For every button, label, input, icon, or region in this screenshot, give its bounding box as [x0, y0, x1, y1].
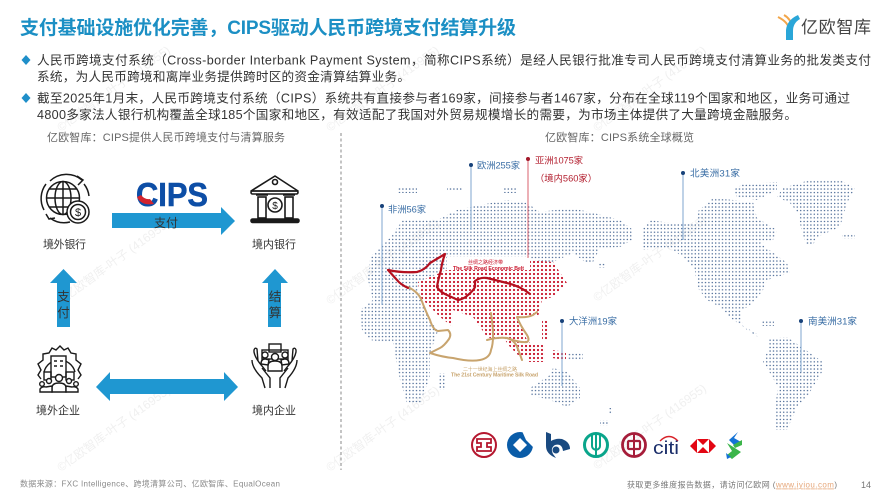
icon: Bank of China	[622, 433, 646, 457]
icon: ICBC	[472, 433, 496, 457]
callout: Oceania: 大洋洲19家	[569, 316, 618, 326]
callout: South America: 南美洲31家	[808, 316, 857, 328]
logo: 亿欧智库: 亿欧智库	[801, 18, 871, 37]
right panel heading: 亿欧智库：CIPS系统全球概览	[545, 130, 694, 144]
callout: Europe: 欧洲255家	[477, 160, 520, 170]
arrow: domestic enterprise to domestic bank: 结	[269, 290, 281, 304]
arrow: payment to domestic bank	[112, 207, 235, 235]
callout: Asia: （境内560家）	[535, 172, 597, 184]
label: Maritime Silk Road	[451, 366, 538, 378]
label box: Silk Road Economic Belt	[447, 257, 530, 272]
icon: HSBC	[690, 439, 716, 453]
icon: Standard Chartered	[726, 432, 742, 459]
label: overseas bank: 境外银行	[43, 237, 86, 251]
label: Maritime Silk Road: The 21st Century Maritime Silk Road	[451, 372, 538, 378]
map: Belt and Road dots	[418, 260, 567, 362]
title: 支付基础设施优化完善，CIPS驱动人民币跨境支付结算升级	[20, 16, 516, 39]
footer: data source: 数据来源：FXC Intelligence、跨境清算公司、亿欧智库、EqualOcean	[20, 478, 280, 488]
watermarks: ©亿欧智库-叶子 (416955)	[54, 42, 173, 134]
callout: Asia	[526, 154, 597, 258]
bullet text block 1	[22, 52, 871, 84]
watermarks	[54, 42, 709, 474]
callout: Oceania	[560, 316, 618, 386]
callout: South America	[799, 316, 857, 372]
watermarks: ©亿欧智库-叶子 (416955)	[323, 42, 442, 134]
watermarks: ©亿欧智库-叶子 (416955)	[54, 215, 173, 307]
panel: CIPS payment flow	[36, 174, 299, 417]
arrow: domestic enterprise to domestic bank: 算	[269, 305, 281, 320]
icon: Bank of Communications	[546, 432, 570, 458]
CIPS logo: CIPS	[136, 176, 208, 213]
map: Eurasia and Africa dots	[360, 187, 633, 403]
logo: 亿欧智库	[778, 15, 871, 40]
chart: CIPS world dot map	[360, 154, 857, 430]
bank logos row	[472, 431, 742, 459]
watermarks: ©亿欧智库-叶子 (416955)	[590, 212, 709, 304]
watermarks: ©亿欧智库-叶子 (416955)	[54, 382, 173, 474]
footer: website link: 获取更多维度报告数据，请访问亿欧网 (www.iyiou.com)	[627, 480, 837, 490]
callout: Africa: 非洲56家	[388, 204, 426, 214]
bullet text block 1: 人民币跨境支付系统（Cross-border Interbank Payment System，简称CIPS系统）是经人民银行批准专司人民币跨境支付清算业务的批发类支付	[37, 52, 871, 68]
arrow: domestic enterprise to domestic bank	[262, 269, 288, 327]
icon: domestic bank	[251, 176, 299, 222]
watermarks: ©亿欧智库-叶子 (416955)	[323, 215, 442, 307]
icon: domestic bank: $	[272, 201, 278, 212]
watermarks: ©亿欧智库-叶子 (416955)	[323, 382, 442, 474]
label box: Silk Road Economic Belt: 丝绸之路经济带	[468, 259, 503, 266]
watermarks: ©亿欧智库-叶子 (416955)	[590, 42, 709, 134]
callout: Africa	[380, 204, 426, 305]
watermarks: ©亿欧智库-叶子 (416955)	[590, 380, 709, 472]
callout: Europe	[469, 160, 520, 230]
arrow: payment to domestic bank: 支付	[154, 216, 178, 230]
route: Maritime Silk Road	[408, 287, 537, 361]
icon: Citi: citi	[653, 438, 679, 458]
bullet text block 1: 系统，为人民币跨境和离岸业务提供跨时区的资金清算结算业务。	[37, 69, 410, 84]
bullet text block 2: 截至2025年1月末，人民币跨境支付系统（CIPS）系统共有直接参与者169家，间接参与者1467家，分布在全球119个国家和地区，业务可通过	[37, 90, 850, 106]
label: Maritime Silk Road: 二十一世纪海上丝绸之路	[463, 366, 517, 373]
bullet text block 2	[22, 90, 850, 122]
icon: globe bank	[41, 174, 89, 223]
callout: North America: 北美洲31家	[690, 168, 740, 180]
arrow: overseas enterprise to overseas bank: 付	[57, 306, 70, 320]
callout: North America	[681, 168, 740, 240]
label box: Silk Road Economic Belt: The Silk Road Economic Belt	[453, 266, 524, 272]
icon: domestic enterprise	[252, 344, 297, 388]
icon: Agricultural Bank of China	[584, 433, 608, 457]
bullet text block 2: 4800多家法人银行机构覆盖全球185个国家和地区，有效适配了我国对外贸易规模增长的需要，为市场主体提供了大量跨境金融服务。	[37, 107, 797, 122]
map: Americas and Greenland dots	[642, 180, 855, 430]
page number: 14	[861, 480, 871, 490]
icon: overseas enterprise	[38, 346, 81, 392]
arrow: two-way trade	[96, 372, 238, 401]
route: Silk Road Economic Belt	[388, 254, 530, 300]
map: Oceania dots	[530, 353, 613, 426]
icon: CCB	[507, 431, 534, 458]
callout: Asia: 亚洲1075家	[535, 154, 583, 166]
label: domestic enterprise: 境内企业	[252, 403, 296, 417]
label: domestic bank: 境内银行	[252, 237, 296, 251]
label: overseas enterprise: 境外企业	[36, 403, 80, 417]
left panel heading: 亿欧智库：CIPS提供人民币跨境支付与清算服务	[47, 130, 285, 144]
arrow: overseas enterprise to overseas bank: 支	[57, 290, 70, 304]
arrow: overseas enterprise to overseas bank	[50, 269, 77, 327]
icon: globe bank: $	[75, 207, 81, 219]
